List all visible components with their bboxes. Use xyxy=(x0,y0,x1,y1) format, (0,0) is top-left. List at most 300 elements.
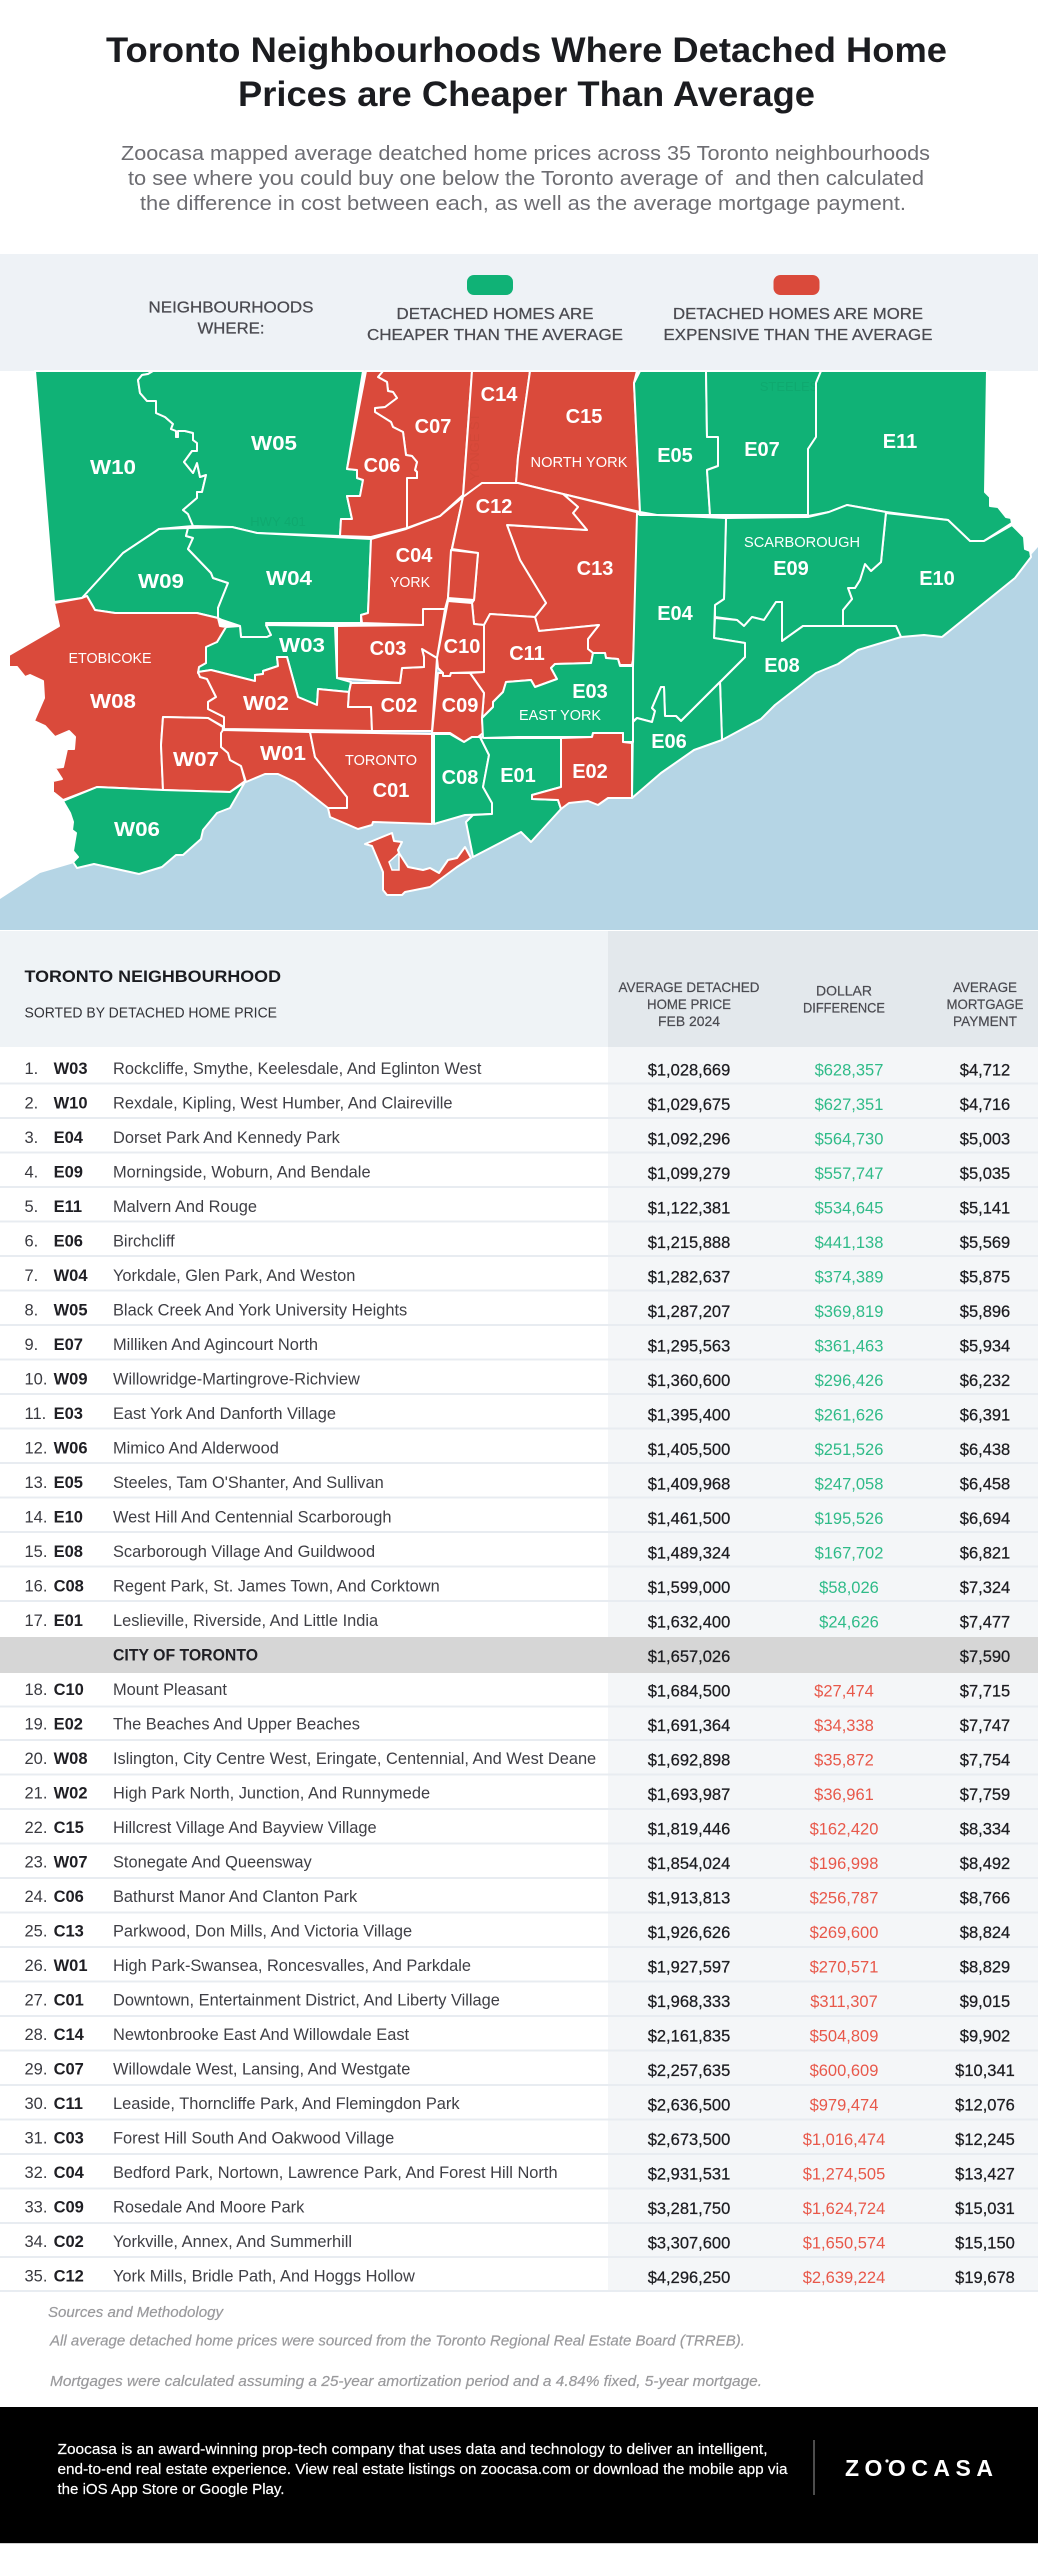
district W05: W05 xyxy=(251,433,297,455)
row 12: $251,526 xyxy=(815,1441,883,1459)
table header: DOLLAR xyxy=(816,982,872,998)
row 30 xyxy=(0,2095,1038,2120)
legend panel: CHEAPER THAN THE AVERAGE xyxy=(367,327,623,344)
row 29: C07 xyxy=(54,2060,84,2078)
district C15: NORTH YORK xyxy=(530,455,628,471)
row 21: $36,961 xyxy=(814,1786,874,1804)
row 17: $7,477 xyxy=(960,1614,1010,1632)
district C08 xyxy=(434,734,492,824)
row 26: High Park-Swansea, Roncesvalles, And Parkdale xyxy=(113,1957,471,1975)
district C07 xyxy=(375,371,472,528)
row 6: $441,138 xyxy=(815,1234,883,1252)
row 6: 6. xyxy=(24,1232,38,1250)
table header: AVERAGE DETACHED xyxy=(618,979,760,995)
row 16: C08 xyxy=(54,1578,84,1596)
row 13: $1,409,968 xyxy=(648,1476,730,1494)
legend panel: WHERE: xyxy=(198,320,264,338)
row 9: Milliken And Agincourt North xyxy=(113,1336,318,1354)
row 25: C13 xyxy=(54,1922,84,1940)
row 8: 8. xyxy=(24,1302,38,1320)
row 35: 35. xyxy=(24,2268,47,2286)
city of Toronto row: $1,657,026 xyxy=(648,1648,730,1666)
row 18: C10 xyxy=(54,1681,84,1699)
row 32: $1,274,505 xyxy=(803,2166,885,2184)
row 1: W03 xyxy=(54,1060,88,1078)
row 8: Black Creek And York University Heights xyxy=(113,1302,407,1320)
row 13: 13. xyxy=(24,1474,47,1492)
district C14 xyxy=(463,371,530,497)
row 17: $1,632,400 xyxy=(648,1614,730,1632)
row 13: $247,058 xyxy=(815,1476,883,1494)
row 24 xyxy=(0,1888,1038,1912)
row 10: W09 xyxy=(54,1370,88,1388)
district E05: E05 xyxy=(657,445,693,467)
district W06: W06 xyxy=(114,819,160,841)
row 12 xyxy=(0,1440,1038,1463)
row 29: $2,257,635 xyxy=(648,2062,730,2080)
row 7 xyxy=(0,1267,1038,1290)
district W09 xyxy=(82,528,228,618)
row 1: $1,028,669 xyxy=(648,1062,730,1080)
district W05 xyxy=(138,371,363,536)
district W08 xyxy=(9,596,226,800)
district E06: E06 xyxy=(651,731,687,753)
row 4: $557,747 xyxy=(815,1165,883,1183)
row 25: $1,926,626 xyxy=(648,1924,730,1942)
row 31: $2,673,500 xyxy=(648,2131,730,2149)
sources and methodology: Sources and Methodology xyxy=(48,2304,225,2321)
district W06 xyxy=(63,782,245,874)
district C08: C08 xyxy=(442,767,478,789)
district E06 xyxy=(632,682,722,798)
row 15: $167,702 xyxy=(815,1544,883,1562)
row 33 xyxy=(0,2198,1038,2223)
row 6 xyxy=(0,1232,1038,1256)
title xyxy=(106,31,947,114)
row 5: $5,141 xyxy=(960,1200,1010,1218)
district C11: C11 xyxy=(509,643,545,665)
table header: TORONTO NEIGHBOURHOOD xyxy=(24,967,281,986)
row 4: Morningside, Woburn, And Bendale xyxy=(113,1164,371,1182)
district W03: W03 xyxy=(279,635,325,657)
table header: AVERAGE xyxy=(953,979,1017,995)
district C13 xyxy=(507,494,640,665)
row 1: $628,357 xyxy=(815,1062,883,1080)
district E04 xyxy=(633,513,745,722)
row 23: W07 xyxy=(54,1854,88,1872)
row 7: $374,389 xyxy=(815,1268,883,1286)
row 3: 3. xyxy=(24,1129,38,1147)
intro text: the difference in cost between each, as well as the average mortgage payment. xyxy=(140,193,906,215)
row 33: C09 xyxy=(54,2198,84,2216)
district C04 xyxy=(361,497,463,625)
row 5: $534,645 xyxy=(815,1200,883,1218)
row 28: 28. xyxy=(24,2026,47,2044)
row 3: $564,730 xyxy=(815,1130,883,1148)
row 15: Scarborough Village And Guildwood xyxy=(113,1543,375,1561)
row 12: $6,438 xyxy=(960,1441,1010,1459)
district E10: E10 xyxy=(919,568,955,590)
row 28: C14 xyxy=(54,2026,85,2044)
district C11 xyxy=(470,614,599,718)
row 17: $24,626 xyxy=(819,1614,879,1632)
district C10: C10 xyxy=(444,636,480,658)
row 2 xyxy=(0,1094,1038,1118)
sources and methodology: Mortgages were calculated assuming a 25-year amortization period and a 4.84% fixed, 5-year mortgage. xyxy=(50,2373,762,2390)
row 27 xyxy=(0,1992,1038,2016)
row 26: $270,571 xyxy=(810,1958,878,1976)
row 12: $1,405,500 xyxy=(648,1441,730,1459)
district E11 xyxy=(808,371,1012,541)
row 33: $15,031 xyxy=(955,2200,1015,2218)
row 32: $2,931,531 xyxy=(648,2166,730,2184)
row 21 xyxy=(0,1784,1038,1809)
row 3: $5,003 xyxy=(960,1130,1010,1148)
row 14: West Hill And Centennial Scarborough xyxy=(113,1508,392,1526)
row 11: $6,391 xyxy=(960,1406,1010,1424)
row 19: 19. xyxy=(24,1716,47,1734)
row 26: 26. xyxy=(24,1957,47,1975)
row 10: $6,232 xyxy=(960,1372,1010,1390)
row 27: $9,015 xyxy=(960,1993,1010,2011)
city of Toronto row: CITY OF TORONTO xyxy=(113,1646,258,1664)
row 14: $6,694 xyxy=(960,1510,1010,1528)
row 26: $1,927,597 xyxy=(648,1958,730,1976)
row 27: $1,968,333 xyxy=(648,1993,730,2011)
intro text: Zoocasa mapped average deatched home prices across 35 Toronto neighbourhoods xyxy=(121,143,930,165)
district C07: C07 xyxy=(415,416,451,438)
row 32: Bedford Park, Nortown, Lawrence Park, And Forest Hill North xyxy=(113,2164,558,2182)
row 30: Leaside, Thorncliffe Park, And Flemingdon Park xyxy=(113,2095,460,2113)
row 35: C12 xyxy=(54,2268,84,2286)
district E03: EAST YORK xyxy=(519,708,601,724)
row 35: $19,678 xyxy=(955,2269,1015,2287)
district E09: E09 xyxy=(773,558,809,580)
row 22: $8,334 xyxy=(960,1820,1010,1838)
row 14 xyxy=(0,1508,1038,1532)
row 7: Yorkdale, Glen Park, And Weston xyxy=(113,1267,355,1285)
row 11 xyxy=(0,1405,1038,1428)
row 14: $195,526 xyxy=(815,1510,883,1528)
row 26: $8,829 xyxy=(960,1958,1010,1976)
row 13 xyxy=(0,1474,1038,1498)
row 34: C02 xyxy=(54,2233,84,2251)
row 17: E01 xyxy=(54,1612,83,1630)
row 16 xyxy=(0,1578,1038,1601)
district C14: YONGE ST xyxy=(467,413,482,481)
district C01: C01 xyxy=(373,780,409,802)
lake xyxy=(0,547,1038,930)
row 25 xyxy=(0,1922,1038,1947)
row 13: $6,458 xyxy=(960,1476,1010,1494)
row 23 xyxy=(0,1854,1038,1878)
legend panel: DETACHED HOMES ARE MORE xyxy=(673,306,923,323)
district E08: E08 xyxy=(764,655,800,677)
row 22: $1,819,446 xyxy=(648,1820,730,1838)
row 17: Leslieville, Riverside, And Little India xyxy=(113,1612,379,1630)
row 24: $1,913,813 xyxy=(648,1890,730,1908)
row 16: $58,026 xyxy=(819,1579,879,1597)
district C02: C02 xyxy=(381,695,417,717)
row 22: Hillcrest Village And Bayview Village xyxy=(113,1819,377,1837)
title: Prices are Cheaper Than Average xyxy=(238,75,815,114)
row 16: $1,599,000 xyxy=(648,1579,730,1597)
district E09 xyxy=(715,505,886,641)
row 19 xyxy=(0,1716,1038,1740)
row 16: $7,324 xyxy=(960,1579,1010,1597)
row 31: 31. xyxy=(24,2130,47,2148)
table header xyxy=(0,931,1038,1047)
row 23: Stonegate And Queensway xyxy=(113,1854,312,1872)
row 10: Willowridge-Martingrove-Richview xyxy=(113,1370,360,1388)
row 24: $8,766 xyxy=(960,1890,1010,1908)
row 18: 18. xyxy=(24,1681,47,1699)
district E04: E04 xyxy=(657,603,694,625)
row 13: Steeles, Tam O'Shanter, And Sullivan xyxy=(113,1474,384,1492)
row 14: E10 xyxy=(54,1508,83,1526)
row 5: 5. xyxy=(24,1198,38,1216)
row 25: $8,824 xyxy=(960,1924,1010,1942)
row 8: $5,896 xyxy=(960,1303,1010,1321)
row 10: $296,426 xyxy=(815,1372,883,1390)
row 35: York Mills, Bridle Path, And Hoggs Hollow xyxy=(113,2268,415,2286)
row 9: $361,463 xyxy=(815,1338,883,1356)
district W08: ETOBICOKE xyxy=(68,651,152,667)
row 20: 20. xyxy=(24,1750,47,1768)
district C02 xyxy=(348,649,437,731)
row 18: $7,715 xyxy=(960,1682,1010,1700)
row 17 xyxy=(24,1612,1010,1632)
row 23: 23. xyxy=(24,1854,47,1872)
row 21: W02 xyxy=(54,1784,88,1802)
row 5: Malvern And Rouge xyxy=(113,1198,257,1216)
district W10: W10 xyxy=(90,457,136,479)
district E11: E11 xyxy=(883,431,917,453)
district E07 xyxy=(706,371,847,515)
row 22: 22. xyxy=(24,1819,47,1837)
table header: MORTGAGE xyxy=(946,996,1024,1012)
district E09: SCARBOROUGH xyxy=(744,535,860,551)
row 21: High Park North, Junction, And Runnymede xyxy=(113,1784,430,1802)
row 21: $1,693,987 xyxy=(648,1786,730,1804)
intro text xyxy=(121,143,930,215)
row 5: E11 xyxy=(54,1198,82,1216)
row 18 xyxy=(0,1681,1038,1706)
district C04: C04 xyxy=(396,545,433,567)
legend panel: EXPENSIVE THAN THE AVERAGE xyxy=(664,327,932,344)
row 21: $7,759 xyxy=(960,1786,1010,1804)
table header: FEB 2024 xyxy=(658,1013,720,1029)
row 2: $1,029,675 xyxy=(648,1096,730,1114)
table header: SORTED BY DETACHED HOME PRICE xyxy=(24,1004,277,1022)
city of Toronto row xyxy=(0,1637,1038,1673)
row 10 xyxy=(0,1370,1038,1394)
row 30: $12,076 xyxy=(955,2096,1015,2114)
district W09: W09 xyxy=(138,571,184,593)
row 11: East York And Danforth Village xyxy=(113,1405,336,1423)
legend panel xyxy=(0,254,1038,371)
logo: ZOOCASA xyxy=(845,2455,993,2481)
row 16: 16. xyxy=(24,1578,47,1596)
row 8: $1,287,207 xyxy=(648,1303,730,1321)
row 11: E03 xyxy=(54,1405,83,1423)
district W02: W02 xyxy=(243,693,289,715)
district E03 xyxy=(482,653,633,742)
row 19: $1,691,364 xyxy=(648,1717,730,1735)
row 31: C03 xyxy=(54,2130,84,2148)
row 20: $35,872 xyxy=(814,1752,874,1770)
row 23: $8,492 xyxy=(960,1855,1010,1873)
district W01 xyxy=(221,730,347,808)
row 33: 33. xyxy=(24,2198,47,2216)
row 9: $1,295,563 xyxy=(648,1338,730,1356)
row 24: Bathurst Manor And Clanton Park xyxy=(113,1888,358,1906)
row 25: $269,600 xyxy=(810,1924,878,1942)
row 13: E05 xyxy=(54,1474,83,1492)
row 30: $2,636,500 xyxy=(648,2096,730,2114)
row 15: 15. xyxy=(24,1543,47,1561)
row 20: Islington, City Centre West, Eringate, Centennial, And West Deane xyxy=(113,1750,596,1768)
district C01 xyxy=(310,732,471,895)
district C04: YORK xyxy=(390,575,430,591)
row 2: $627,351 xyxy=(815,1096,883,1114)
row 5: $1,122,381 xyxy=(648,1200,730,1218)
row 3 xyxy=(0,1129,1038,1152)
row 31 xyxy=(0,2130,1038,2154)
map of Toronto neighbourhoods xyxy=(0,371,1038,930)
values column background xyxy=(608,1047,1038,2291)
row 15: E08 xyxy=(54,1543,83,1561)
row 23: $1,854,024 xyxy=(648,1855,730,1873)
row 27: 27. xyxy=(24,1992,47,2010)
district C12: C12 xyxy=(476,496,512,518)
row 12: W06 xyxy=(54,1440,88,1458)
district E03: E03 xyxy=(572,681,608,703)
row 9: 9. xyxy=(24,1336,38,1354)
district E01: E01 xyxy=(500,765,536,787)
row 27: Downtown, Entertainment District, And Liberty Village xyxy=(113,1992,500,2010)
row 4: $5,035 xyxy=(960,1165,1010,1183)
row 31: $12,245 xyxy=(955,2131,1015,2149)
row 2: Rexdale, Kipling, West Humber, And Claireville xyxy=(113,1094,453,1112)
row 34: 34. xyxy=(24,2233,47,2251)
table header: PAYMENT xyxy=(953,1013,1017,1029)
district C15 xyxy=(516,371,640,512)
district E10 xyxy=(843,513,1031,637)
row 8: $369,819 xyxy=(815,1303,883,1321)
row 35: $4,296,250 xyxy=(648,2269,730,2287)
row 19: $34,338 xyxy=(814,1717,874,1735)
row 33: $1,624,724 xyxy=(803,2200,885,2218)
district C14: C14 xyxy=(481,384,518,406)
intro text: to see where you could buy one below the Toronto average of and then calculated xyxy=(128,168,924,190)
row 27: $311,307 xyxy=(810,1993,878,2011)
row 2: $4,716 xyxy=(960,1096,1010,1114)
row 24: C06 xyxy=(54,1888,84,1906)
row 5 xyxy=(0,1198,1038,1222)
row 28: $2,161,835 xyxy=(648,2028,730,2046)
table header: DIFFERENCE xyxy=(803,1000,885,1016)
row 25: 25. xyxy=(24,1922,47,1940)
row 33: $3,281,750 xyxy=(648,2200,730,2218)
row 19: E02 xyxy=(54,1716,83,1734)
sources and methodology xyxy=(48,2304,762,2390)
row 30: 30. xyxy=(24,2095,47,2113)
row 7: 7. xyxy=(24,1267,38,1285)
district E02 xyxy=(532,733,632,809)
district W02 xyxy=(198,657,372,731)
row 29: $600,609 xyxy=(810,2062,878,2080)
row 35: $2,639,224 xyxy=(803,2269,885,2287)
row 8 xyxy=(0,1302,1038,1325)
row 34: $1,650,574 xyxy=(803,2234,885,2252)
row 34 xyxy=(0,2233,1038,2257)
row 28: Newtonbrooke East And Willowdale East xyxy=(113,2026,410,2044)
district W07: W07 xyxy=(173,749,219,771)
row 4: $1,099,279 xyxy=(648,1165,730,1183)
row 6: Birchcliff xyxy=(113,1232,175,1250)
row 2: 2. xyxy=(24,1094,38,1112)
row 35 xyxy=(0,2268,1038,2291)
row 29: $10,341 xyxy=(955,2062,1015,2080)
district W08: W08 xyxy=(90,691,136,713)
row 7: $1,282,637 xyxy=(648,1268,730,1286)
row 9 xyxy=(0,1336,1038,1360)
footer about text: Zoocasa is an award-winning prop-tech company that uses data and technology to deliver an intelligent, xyxy=(58,2441,768,2458)
row 30: C11 xyxy=(54,2095,83,2113)
row 7: $5,875 xyxy=(960,1268,1010,1286)
district E07: E07 xyxy=(744,439,780,461)
row 14: 14. xyxy=(24,1508,47,1526)
district C12 xyxy=(452,483,587,625)
row 6: E06 xyxy=(54,1232,83,1250)
district C01: TORONTO xyxy=(345,753,417,769)
row 24: $256,787 xyxy=(810,1890,878,1908)
row 34: $3,307,600 xyxy=(648,2234,730,2252)
row 9: $5,934 xyxy=(960,1338,1010,1356)
footer about text: end-to-end real estate experience. View real estate listings on zoocasa.com or download the mobile app via xyxy=(58,2461,788,2478)
table xyxy=(0,931,1038,2291)
district C03 xyxy=(337,609,445,683)
row 4 xyxy=(0,1164,1038,1187)
district E08 xyxy=(714,602,901,740)
row 32: $13,427 xyxy=(955,2166,1015,2184)
district W04: W04 xyxy=(266,568,313,590)
footer about text: the iOS App Store or Google Play. xyxy=(58,2481,284,2498)
district C13: C13 xyxy=(577,558,613,580)
row 1: Rockcliffe, Smythe, Keelesdale, And Eglinton West xyxy=(113,1060,482,1078)
row 4: 4. xyxy=(24,1164,38,1182)
row 4: E09 xyxy=(54,1164,83,1182)
row 29: 29. xyxy=(24,2060,47,2078)
district W05: HWY 401 xyxy=(250,514,306,529)
row 34: $15,150 xyxy=(955,2234,1015,2252)
row 25: Parkwood, Don Mills, And Victoria Village xyxy=(113,1922,412,1940)
row 22: C15 xyxy=(54,1819,84,1837)
row 7: W04 xyxy=(54,1267,88,1285)
district C06 xyxy=(340,371,417,537)
row 12: 12. xyxy=(24,1440,47,1458)
row 32 xyxy=(0,2164,1038,2188)
row 28: $9,902 xyxy=(960,2028,1010,2046)
row 22 xyxy=(0,1819,1038,1844)
row 26 xyxy=(0,1957,1038,1982)
row 2: W10 xyxy=(54,1094,88,1112)
row 15: $1,489,324 xyxy=(648,1544,730,1562)
row 6: $1,215,888 xyxy=(648,1234,730,1252)
row 18: $27,474 xyxy=(814,1682,874,1700)
row 24: 24. xyxy=(24,1888,47,1906)
